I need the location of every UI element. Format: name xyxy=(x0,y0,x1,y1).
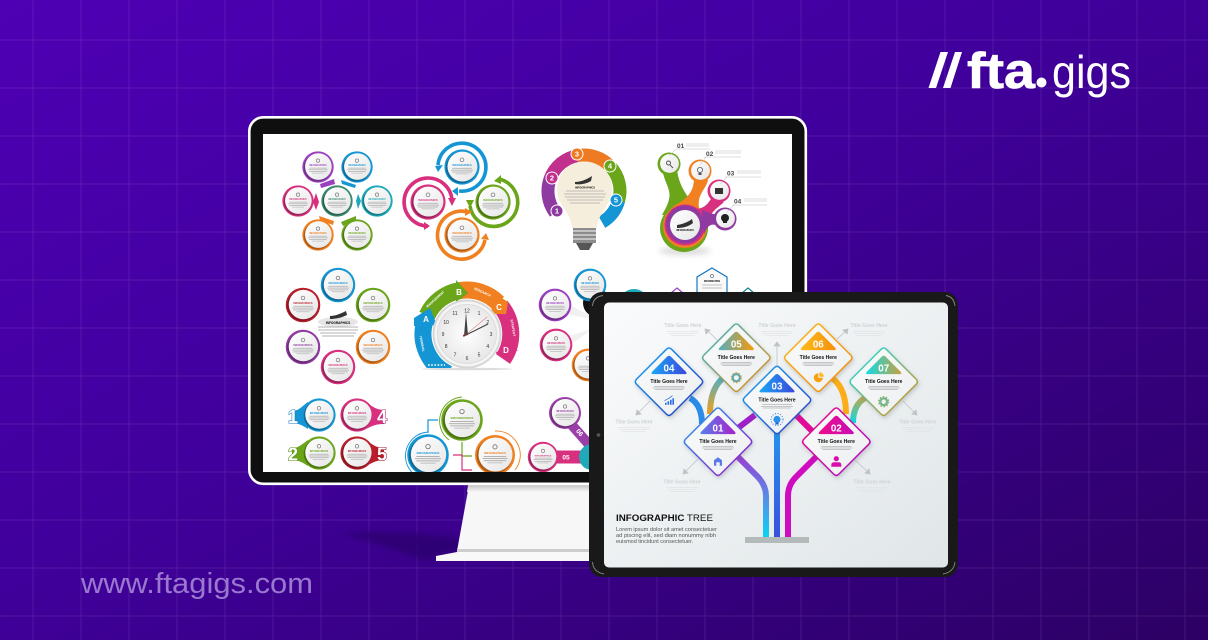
infographic: ring of six circles: INFOGRAPHICS xyxy=(326,321,350,325)
infographic: clock: TERMINAL xyxy=(418,335,426,352)
infographic: hexagon cards: INFORMATION xyxy=(704,280,720,283)
logo: fta.gigs xyxy=(928,43,1131,99)
infographic: clock: 3 xyxy=(490,332,493,338)
infographic: speech-bubble circles: INFOGRAPHICS xyxy=(547,342,565,345)
infographic: ring of six circles: INFOGRAPHICS xyxy=(329,364,348,367)
faint outer titles xyxy=(615,323,937,492)
infographic: ring of six circles xyxy=(286,268,390,384)
infographic: clock: 10 xyxy=(443,320,449,326)
infographic: six circles around centre: INFOGRAPHICS xyxy=(328,198,346,201)
diamond 04: Title Goes Here xyxy=(650,379,688,385)
infographic: 01 to 04 branching circles: 02 xyxy=(706,151,714,158)
infographic: four circular arrows: INFOGRAPHICS xyxy=(452,164,472,167)
faint outer titles: Title Goes Here xyxy=(664,323,702,329)
infographic: six circles around centre: INFOGRAPHICS xyxy=(348,164,366,167)
website url: www.ftagigs.com xyxy=(80,568,313,600)
infographic: 01 to 04 branching circles: INFOGRAPHICS xyxy=(676,229,694,232)
diamond 05: Title Goes Here xyxy=(718,355,755,361)
infographic: light bulb: 2 xyxy=(550,174,554,183)
diamond 01: 01 xyxy=(713,423,724,434)
infographic: 05 06 linked circles: INFOGRAPHICS xyxy=(556,410,574,413)
infographic: clock: STRATEGY xyxy=(510,319,517,337)
infographic: ring of six circles: INFOGRAPHICS xyxy=(294,302,313,305)
infographic: numbered tabs 1 2 4 5 xyxy=(288,398,387,470)
infographic: clock: C xyxy=(496,303,502,312)
infographic: clock: 9 xyxy=(442,332,445,338)
pointer arrows xyxy=(636,329,917,474)
infographic: clock: B xyxy=(456,288,462,297)
tablet heading and description: Lorem ipsum dolor sit amet consectetuer xyxy=(616,527,717,533)
infographic: numbered tabs 1 2 4 5: INFOGRAPHICS xyxy=(310,450,329,453)
infographic: numbered tabs 1 2 4 5: 2 xyxy=(288,444,298,464)
infographic: clock: 12 xyxy=(464,308,470,314)
infographic: connected circles: INFOGRAPHICS xyxy=(484,451,506,455)
infographic: light bulb: 1 xyxy=(555,207,559,216)
infographic: connected circles xyxy=(405,397,520,478)
diamond 05 xyxy=(703,324,770,391)
infographic: six circles around centre: INFOGRAPHICS xyxy=(309,232,327,235)
infographic: numbered tabs 1 2 4 5: INFOGRAPHICS xyxy=(310,412,329,415)
infographic: light bulb: 5 xyxy=(614,196,618,205)
infographic: numbered tabs 1 2 4 5: 1 xyxy=(288,407,298,427)
diamond 02 xyxy=(803,408,870,475)
tablet xyxy=(589,292,958,577)
monitor screen infographics xyxy=(282,143,767,478)
infographic: ring of six circles: INFOGRAPHICS xyxy=(329,282,348,285)
infographic: numbered tabs 1 2 4 5: 5 xyxy=(377,444,387,464)
diamond 03 xyxy=(743,366,811,434)
infographic: clock: 2 xyxy=(486,320,489,326)
faint outer titles: Title Goes Here xyxy=(758,323,796,329)
infographic: clock: 8 xyxy=(445,344,448,350)
infographic: clock: 6 xyxy=(466,356,469,362)
infographic: 05 06 linked circles: 06 xyxy=(574,428,584,438)
diamond 06 xyxy=(785,324,852,391)
diamond 04 xyxy=(635,348,703,415)
tree trunks and branches xyxy=(690,378,865,537)
faint outer titles: Title Goes Here xyxy=(850,323,888,329)
infographic: 01 to 04 branching circles xyxy=(658,143,767,255)
infographic: 01 to 04 branching circles: 03 xyxy=(727,170,735,178)
infographic: ring of six circles: INFOGRAPHICS xyxy=(364,302,383,305)
infographic: clock: 5 xyxy=(478,353,481,359)
infographic: 01 to 04 branching circles: 01 xyxy=(677,143,685,150)
infographic: 01 to 04 branching circles: 04 xyxy=(734,198,742,206)
faint outer titles: Title Goes Here xyxy=(663,480,701,486)
tablet heading and description: euismod tincidunt consectetuer. xyxy=(616,539,693,545)
infographic: clock: 11 xyxy=(452,311,458,317)
infographic: speech-bubble circles: INFOGRAPHICS xyxy=(581,282,599,285)
diamond 04: 04 xyxy=(664,363,675,374)
infographic: connected circles: INFOGRAPHICS xyxy=(417,451,439,455)
infographic: six circles around centre: INFOGRAPHICS xyxy=(368,198,386,201)
monitor stand xyxy=(340,485,600,562)
infographic: 05 06 linked circles: INFOGRAPHICS xyxy=(535,454,552,457)
infographic: speech-bubble circles: INFOGRAPHICS xyxy=(546,302,564,305)
infographic: light bulb: 4 xyxy=(608,162,613,171)
infographic: clock xyxy=(414,280,520,370)
diamond 01 xyxy=(684,408,752,475)
diamond 01: Title Goes Here xyxy=(699,439,737,445)
infographic: clock: A xyxy=(423,315,429,324)
infographic: light bulb: 3 xyxy=(575,150,579,159)
monitor xyxy=(249,117,806,484)
infographic: numbered tabs 1 2 4 5: 4 xyxy=(377,407,387,427)
faint outer titles: Title Goes Here xyxy=(853,480,891,486)
infographic: four circular arrows: INFOGRAPHICS xyxy=(483,199,503,202)
infographic: clock: 7 xyxy=(454,353,457,359)
diamond 06: Title Goes Here xyxy=(800,355,837,361)
logo: fta.gigs: fta xyxy=(967,43,1036,99)
tablet camera xyxy=(597,433,600,437)
infographic: four circular arrows xyxy=(404,143,518,259)
tree base xyxy=(745,537,809,543)
infographic: light bulb xyxy=(546,148,622,250)
infographic: numbered tabs 1 2 4 5: INFOGRAPHICS xyxy=(348,450,367,453)
infographic: clock: RESEARCH xyxy=(473,287,492,298)
infographic: ring of six circles: INFOGRAPHICS xyxy=(294,344,313,347)
infographic: clock: 1 xyxy=(478,311,481,317)
infographic: six circles around centre: INFOGRAPHICS xyxy=(348,232,366,235)
diamond 02: 02 xyxy=(831,423,842,434)
infographic: numbered tabs 1 2 4 5: INFOGRAPHICS xyxy=(348,412,367,415)
faint outer titles: Title Goes Here xyxy=(899,420,937,426)
diamond 02: Title Goes Here xyxy=(818,439,855,445)
diamond 03: 03 xyxy=(772,382,783,393)
diamond 06: 06 xyxy=(813,339,824,350)
tablet heading and description: ad piscing elit, sed diam nonummy nibh xyxy=(616,533,716,539)
infographic: ring of six circles: INFOGRAPHICS xyxy=(364,344,383,347)
logo: fta.gigs: gigs xyxy=(1052,46,1131,98)
diamond 07: 07 xyxy=(878,363,890,374)
infographic: four circular arrows: INFOGRAPHICS xyxy=(418,199,438,202)
diamond 05: 05 xyxy=(731,339,742,350)
infographic: clock: 4 xyxy=(486,344,489,350)
infographic: speech-bubble circles xyxy=(539,269,611,381)
tablet heading and description xyxy=(616,512,717,545)
infographic: clock: MANAGEMENT xyxy=(425,290,445,309)
infographic: 05 06 linked circles xyxy=(528,397,589,472)
infographic: six circles around centre xyxy=(282,151,393,251)
infographic: 05 06 linked circles: 05 xyxy=(562,454,570,462)
infographic: six circles around centre: INFOGRAPHICS xyxy=(309,164,327,167)
faint outer titles: Title Goes Here xyxy=(615,420,653,426)
tablet heading and description: INFOGRAPHIC TREE xyxy=(616,512,713,523)
diamond 07 xyxy=(850,348,917,415)
infographic: connected circles: INFOGRAPHICS xyxy=(451,416,473,420)
infographic: four circular arrows: INFOGRAPHICS xyxy=(452,232,472,235)
infographic: six circles around centre: INFOGRAPHICS xyxy=(289,198,307,201)
infographic: hexagon cards xyxy=(625,267,754,292)
infographic: clock: D xyxy=(503,346,509,355)
diamond 03: Title Goes Here xyxy=(758,398,796,404)
diamond 07: Title Goes Here xyxy=(865,379,903,385)
infographic: light bulb: INFOGRAPHICS xyxy=(575,186,595,190)
